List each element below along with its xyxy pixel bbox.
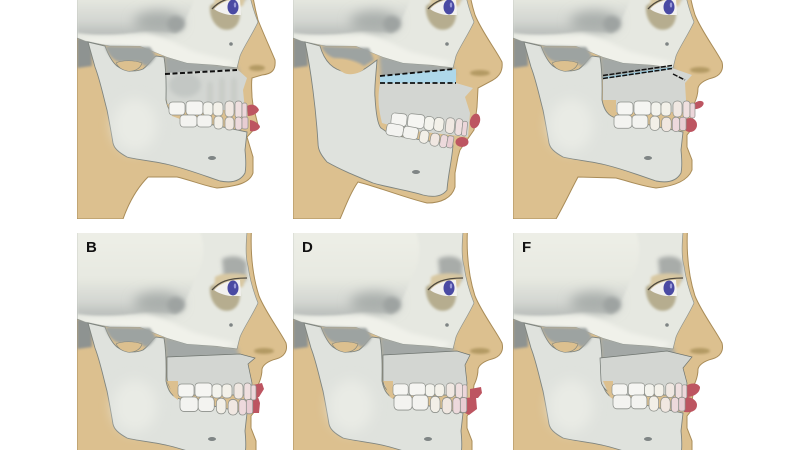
skull: [77, 221, 258, 361]
lower jaw: [524, 323, 683, 450]
lower lip: [250, 120, 260, 131]
lower lip: [250, 397, 260, 413]
upper jaw: [600, 351, 692, 395]
lower lip: [685, 118, 697, 132]
upper jaw: [379, 83, 473, 137]
lower jaw: [304, 323, 463, 450]
lower teeth: [180, 115, 248, 130]
head and skin: [293, 0, 502, 219]
panel letter F: F: [522, 239, 531, 256]
panel letter D: D: [302, 239, 313, 256]
lower lip: [684, 397, 697, 412]
upper lip: [252, 383, 264, 397]
upper lip: [694, 100, 704, 110]
thin blue gap: [603, 67, 672, 79]
upper lip: [247, 105, 259, 116]
upper jaw: [383, 351, 470, 395]
upper lip: [470, 114, 480, 128]
dashed cuts: [380, 69, 456, 83]
gap behind teeth: [603, 100, 616, 112]
upper teeth: [390, 112, 468, 136]
panel C: jaw rotated with graft gap: [293, 0, 502, 219]
lower jaw: [305, 42, 453, 196]
panel F: final corrected profile: [513, 221, 723, 450]
head and skin: [293, 221, 503, 450]
upper jaw: [165, 69, 247, 110]
notch: [321, 46, 374, 66]
panel E: maxilla impacted: [513, 0, 723, 219]
graft gap: [380, 69, 456, 83]
panel letter B: B: [86, 239, 97, 256]
head and skin: [513, 0, 723, 219]
gap behind teeth: [603, 381, 613, 399]
panel D: maxilla and mandible repositioned: [293, 221, 503, 450]
panel A: original profile with planned cut: [77, 0, 275, 219]
gap behind teeth: [167, 104, 180, 119]
upper teeth: [612, 383, 687, 398]
head and skin: [77, 221, 287, 450]
skull: [513, 0, 694, 80]
cut line: [165, 70, 237, 74]
lower jaw: [88, 42, 247, 182]
head and skin: [77, 0, 275, 219]
head and skin: [513, 221, 723, 450]
upper teeth: [617, 101, 695, 118]
lower jaw: [524, 42, 683, 182]
lower lip: [456, 137, 468, 147]
lower jaw: [88, 323, 247, 450]
lower teeth: [180, 397, 253, 415]
skull: [513, 221, 694, 361]
upper jaw: [603, 68, 692, 112]
panel B: maxilla advanced: [77, 221, 287, 450]
skull: [293, 0, 474, 80]
lower teeth: [613, 395, 685, 412]
skull: [77, 0, 258, 80]
gap behind teeth: [383, 381, 393, 399]
mental foramen: [412, 170, 420, 174]
skull: [293, 221, 474, 361]
lower teeth: [385, 123, 455, 149]
upper teeth: [393, 383, 467, 398]
lower teeth: [614, 115, 686, 132]
gap behind teeth: [167, 381, 178, 400]
upper teeth: [169, 101, 247, 118]
upper jaw: [167, 354, 255, 395]
lower teeth: [394, 395, 467, 414]
upper lip: [470, 387, 482, 398]
lower lip: [465, 397, 477, 415]
dashed cuts: [603, 66, 685, 80]
notch skin: [339, 60, 364, 74]
upper lip: [686, 383, 700, 397]
upper teeth: [178, 383, 256, 400]
